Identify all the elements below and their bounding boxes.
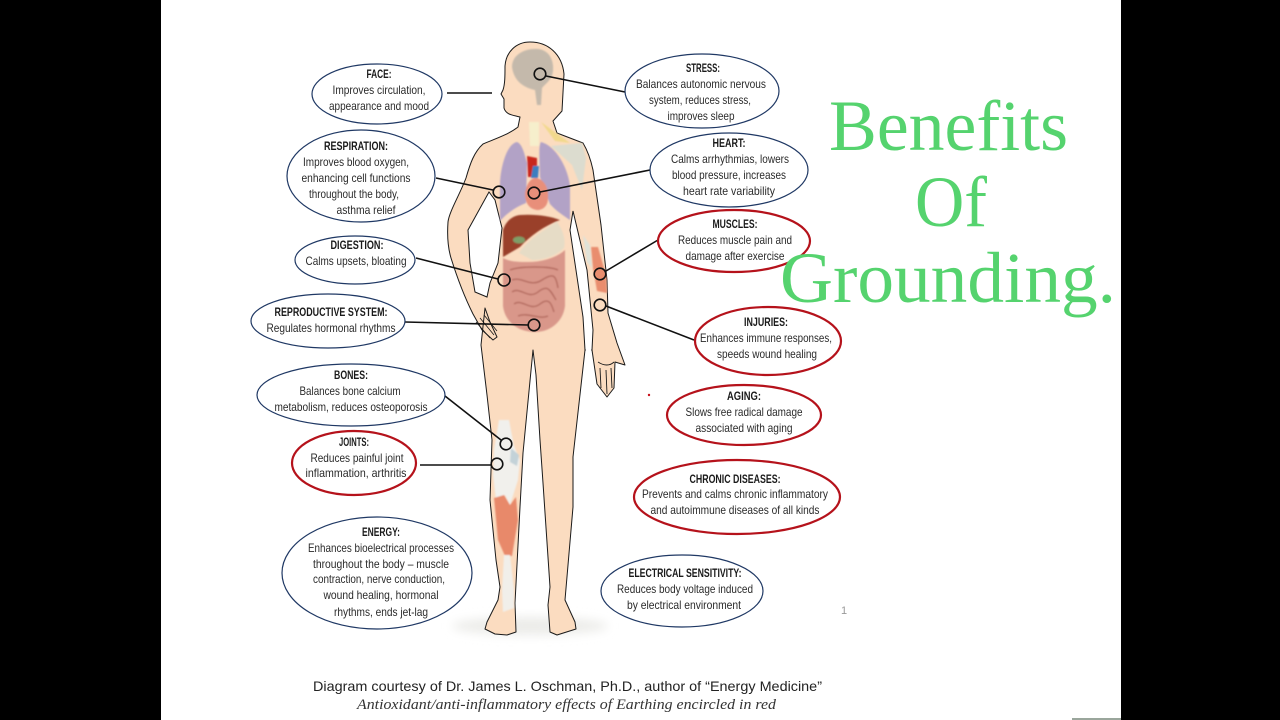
callout: bones: metabolism, reduces osteoporosis bbox=[274, 400, 428, 414]
callout: respiration: RESPIRATION: bbox=[324, 139, 388, 153]
knee and tendons bbox=[493, 420, 520, 505]
callout: injuries: speeds wound healing bbox=[717, 347, 817, 361]
liver bbox=[503, 215, 560, 257]
forearm muscles bbox=[591, 247, 607, 293]
gap between right arm and torso bbox=[570, 211, 593, 350]
callout: respiration bbox=[287, 130, 435, 222]
body figure bbox=[448, 42, 625, 635]
callout: heart bbox=[650, 133, 808, 207]
callout: chronic diseases: and autoimmune diseases of all kinds bbox=[650, 503, 820, 517]
diagram credit: Diagram courtesy of Dr. James L. Oschman, Ph.D., author of “Energy Medicine” bbox=[313, 678, 822, 694]
title: Of bbox=[915, 162, 987, 242]
callout: respiration: Improves blood oxygen, bbox=[303, 155, 409, 169]
callout: electrical sensitivity: ELECTRICAL SENSITIVITY: bbox=[628, 566, 742, 580]
floor shadow bbox=[452, 617, 608, 635]
callout: bones bbox=[257, 364, 445, 426]
callout: energy: contraction, nerve conduction, bbox=[313, 572, 445, 586]
callout: heart: blood pressure, increases bbox=[672, 168, 786, 182]
callout: aging: associated with aging bbox=[696, 421, 792, 435]
intestines bbox=[503, 250, 565, 332]
forearm bones bbox=[583, 235, 592, 268]
callout: joints: inflammation, arthritis bbox=[306, 466, 406, 480]
callout: joints: Reduces painful joint bbox=[310, 451, 404, 465]
callout: energy bbox=[282, 517, 472, 629]
callout: respiration: enhancing cell functions bbox=[302, 171, 410, 185]
callout: heart: HEART: bbox=[712, 136, 746, 150]
callout: aging: AGING: bbox=[727, 389, 761, 403]
ankle tendons bbox=[502, 555, 514, 612]
aorta and vena cava bbox=[527, 156, 537, 177]
callout: electrical sensitivity bbox=[601, 555, 763, 627]
callout: digestion: DIGESTION: bbox=[330, 238, 384, 252]
left hand fingers bbox=[476, 315, 497, 338]
callout: heart: heart rate variability bbox=[683, 184, 775, 198]
callout: stress bbox=[625, 54, 779, 128]
callout: digestion: Calms upsets, bloating bbox=[306, 254, 406, 268]
callout: reproductive system bbox=[251, 294, 405, 348]
callout: face: Improves circulation, bbox=[332, 83, 426, 97]
callout: digestion bbox=[295, 236, 415, 284]
callout: energy: wound healing, hormonal bbox=[323, 588, 438, 602]
lungs bbox=[500, 142, 570, 221]
heart bbox=[525, 178, 548, 210]
callout: reproductive system: Regulates hormonal rhythms bbox=[266, 321, 396, 335]
title: Benefits bbox=[829, 86, 1068, 166]
callout: stress: Balances autonomic nervous bbox=[636, 77, 766, 91]
callout: energy: rhythms, ends jet-lag bbox=[334, 605, 428, 619]
callout: energy: Enhances bioelectrical processes bbox=[308, 541, 454, 555]
callout: energy: throughout the body – muscle bbox=[313, 557, 449, 571]
stomach bbox=[519, 222, 565, 260]
callout: stress: improves sleep bbox=[668, 109, 735, 123]
slide background bbox=[161, 0, 1121, 720]
gap between left arm and torso bbox=[468, 192, 502, 297]
callout: respiration: throughout the body, bbox=[309, 187, 399, 201]
body silhouette bbox=[448, 42, 625, 635]
callout: joints: JOINTS: bbox=[339, 435, 369, 449]
callout: injuries: Enhances immune responses, bbox=[700, 331, 832, 345]
callout: chronic diseases: Prevents and calms chronic inflammatory bbox=[642, 487, 828, 501]
callout: face: FACE: bbox=[366, 67, 392, 81]
marker circles bbox=[491, 68, 606, 470]
title: Grounding. bbox=[780, 238, 1116, 318]
shoulder bone bbox=[551, 143, 586, 190]
callout: electrical sensitivity: Reduces body voltage induced bbox=[617, 582, 753, 596]
shin muscles bbox=[494, 495, 518, 556]
callout: face bbox=[312, 64, 442, 124]
callout: stress: system, reduces stress, bbox=[649, 93, 751, 107]
callout: muscles: damage after exercise bbox=[686, 249, 785, 263]
callout: muscles: Reduces muscle pain and bbox=[678, 233, 792, 247]
right hand fingers bbox=[598, 362, 614, 394]
callout: chronic diseases bbox=[634, 460, 840, 534]
callout: electrical sensitivity: by electrical environment bbox=[627, 598, 742, 612]
connector lines bbox=[405, 76, 694, 465]
callout: reproductive system: REPRODUCTIVE SYSTEM: bbox=[274, 305, 388, 319]
callout: energy: ENERGY: bbox=[362, 525, 400, 539]
callout: bones: Balances bone calcium bbox=[300, 384, 401, 398]
gallbladder bbox=[513, 236, 525, 244]
callout: face: appearance and mood bbox=[329, 99, 429, 113]
title bbox=[780, 86, 1116, 318]
callout: injuries bbox=[695, 307, 841, 375]
brain bbox=[512, 49, 553, 105]
callout: chronic diseases: CHRONIC DISEASES: bbox=[690, 472, 780, 486]
callout: muscles bbox=[658, 210, 810, 272]
callout: muscles: MUSCLES: bbox=[712, 217, 758, 231]
callout: heart: Calms arrhythmias, lowers bbox=[671, 152, 789, 166]
callout: respiration: asthma relief bbox=[336, 203, 396, 217]
callout: stress: STRESS: bbox=[686, 61, 720, 75]
callout: joints bbox=[292, 431, 416, 495]
callout: bones: BONES: bbox=[334, 368, 368, 382]
stray red dot bbox=[648, 394, 650, 396]
callout: injuries: INJURIES: bbox=[744, 315, 788, 329]
neck nerves and spine bbox=[529, 122, 539, 146]
caption: Antioxidant/anti-inflammatory effects of Earthing encircled in red bbox=[356, 697, 777, 713]
slide number: 1 bbox=[841, 605, 847, 617]
callout: aging: Slows free radical damage bbox=[686, 405, 803, 419]
callout: aging bbox=[667, 385, 821, 445]
